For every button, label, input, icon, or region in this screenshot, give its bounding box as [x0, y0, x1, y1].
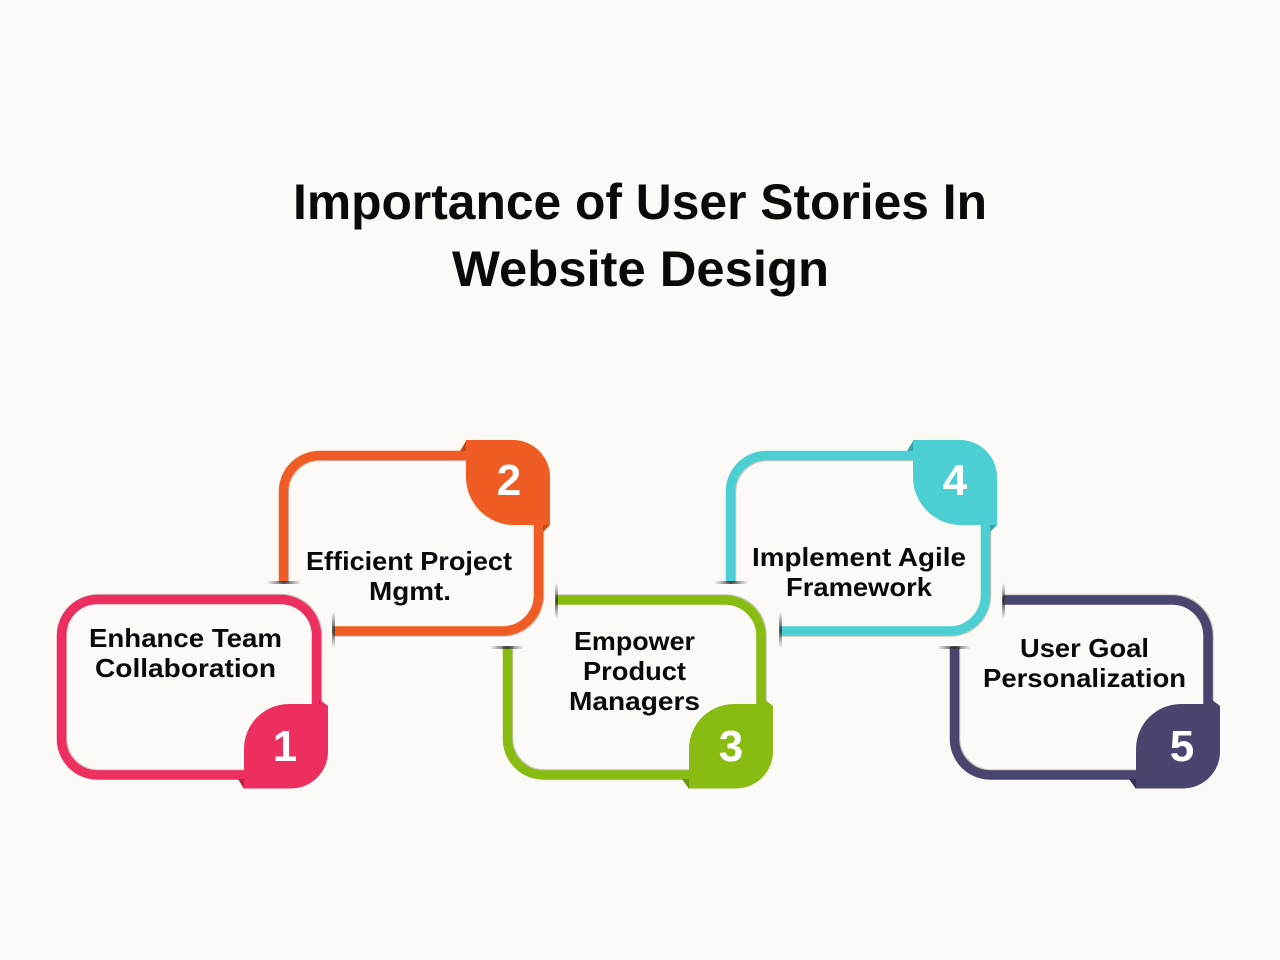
badge: number 4 [913, 440, 997, 525]
panel: step 5 User Goal Personalization [937, 583, 1220, 789]
label: step 4: Implement Agile [752, 542, 966, 572]
label: step 1 [89, 623, 282, 683]
label: step 1: Enhance Team [89, 623, 282, 653]
badge: number 5 [1136, 700, 1220, 789]
badge: number 3: 3 [719, 722, 743, 771]
label: step 2: Mgmt. [369, 576, 451, 606]
title [293, 174, 987, 297]
label: step 2 [306, 546, 512, 606]
badge: number 5: 5 [1170, 722, 1194, 771]
label: step 2: Efficient Project [306, 546, 512, 576]
panel: step 4 Implement Agile Framework [714, 440, 997, 648]
badge: number 2: 2 [497, 456, 521, 505]
label: step 5 [983, 633, 1186, 693]
label: step 3 [569, 626, 700, 716]
label: step 3: Product [583, 656, 686, 686]
label: step 5: Personalization [983, 663, 1186, 693]
badge: number 1 [244, 700, 328, 789]
badge: number 3 [689, 700, 773, 789]
badge: number 2 [466, 440, 550, 525]
label: step 1: Collaboration [95, 653, 276, 683]
label: step 4 [752, 542, 966, 602]
panel: step 3 Empower Product Managers [490, 583, 773, 789]
label: step 3: Managers [569, 686, 700, 716]
badge: number 4: 4 [943, 456, 968, 505]
label: step 5: User Goal [1020, 633, 1149, 663]
title: Importance of User Stories In [293, 174, 987, 230]
panel: step 1 Enhance Team Collaboration [62, 598, 328, 789]
label: step 3: Empower [574, 626, 695, 656]
panel: step 2 Efficient Project Mgmt. [267, 440, 550, 648]
label: step 4: Framework [786, 572, 933, 602]
title: Website Design [452, 241, 829, 297]
badge: number 1: 1 [273, 722, 297, 771]
